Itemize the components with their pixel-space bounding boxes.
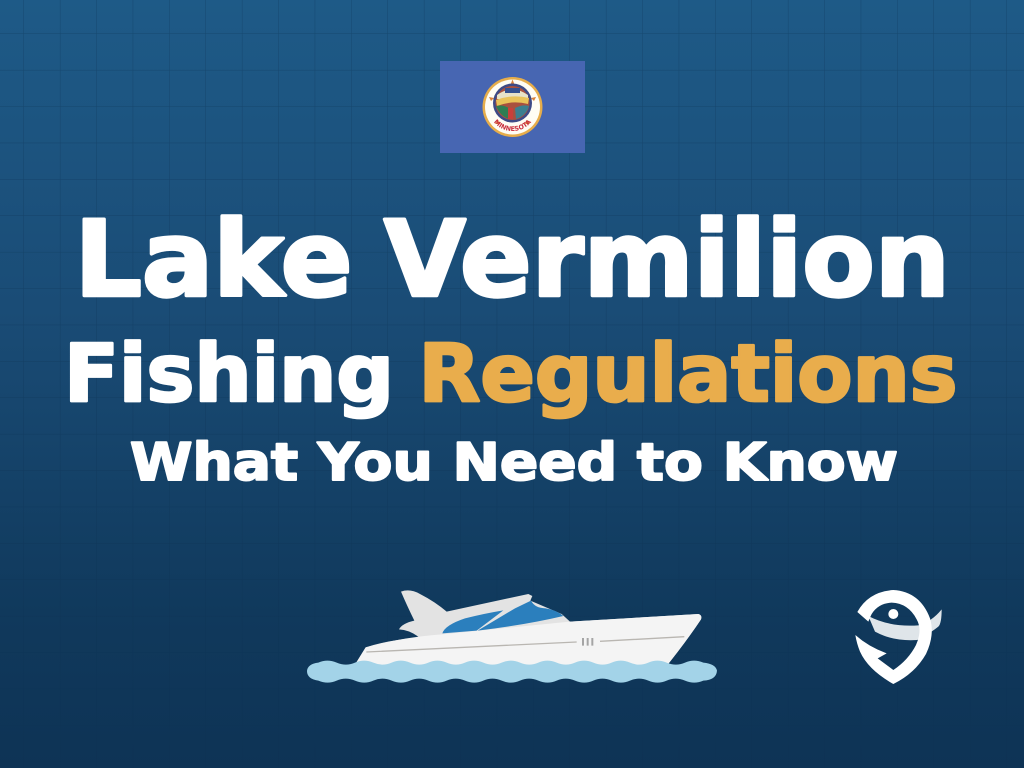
title: Lake Vermilion: Lake (74, 198, 352, 320)
icon: motor boat on water (307, 590, 717, 683)
icon: fish hook logo (855, 590, 942, 684)
heading: Fishing Regulations: Regulations (418, 328, 958, 420)
heading: Fishing Regulations: Fishing (64, 328, 394, 420)
subtitle: What You Need to Know: What You Need to Know (130, 433, 898, 493)
icon: Minnesota state flag (440, 61, 585, 153)
title: Lake Vermilion (74, 198, 950, 320)
title: Lake Vermilion: Vermilion (384, 198, 950, 320)
seal lettering: MINNESOTA (494, 119, 532, 131)
heading: Fishing Regulations (64, 328, 958, 420)
